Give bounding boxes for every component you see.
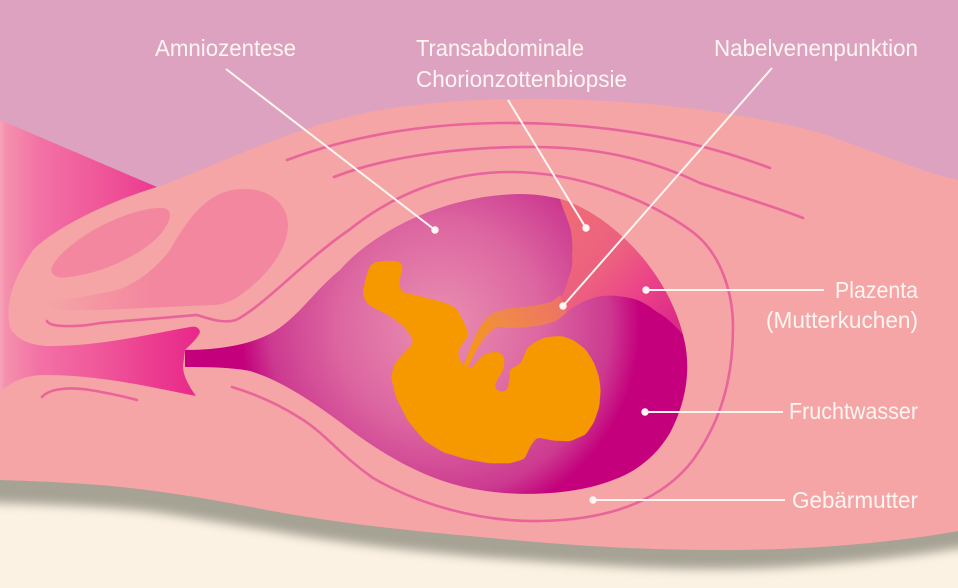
- body shadow: [0, 470, 958, 569]
- body tissue: [0, 99, 958, 550]
- label: Plazenta (Mutterkuchen): Plazenta: [835, 277, 918, 303]
- leader: Nabelvenenpunktion: [563, 68, 772, 306]
- vaginal canal: [0, 120, 205, 410]
- placenta: [556, 199, 683, 335]
- label: Transabdominale Chorionzottenbiopsie: Chorionzottenbiopsie: [416, 66, 627, 92]
- label: Plazenta (Mutterkuchen): [766, 277, 918, 333]
- amniotic cavity: [185, 194, 687, 494]
- label: Transabdominale Chorionzottenbiopsie: [416, 35, 627, 92]
- abdominal wall line 2: [334, 147, 803, 218]
- fetus: [363, 261, 601, 463]
- leader lines: [226, 68, 824, 500]
- cream floor: [0, 300, 958, 588]
- uterus outline lines: [42, 123, 803, 521]
- bladder small lobe: [51, 208, 170, 278]
- leader dots: [431, 224, 650, 504]
- bladder large lobe: [45, 189, 288, 310]
- lower wall line: [42, 388, 137, 400]
- label: Fruchtwasser: Fruchtwasser: [789, 398, 918, 424]
- leader: Plazenta: [646, 289, 824, 291]
- label: Gebärmutter: Gebärmutter: [792, 487, 918, 513]
- label: Amniozentese: Amniozentese: [155, 35, 296, 61]
- background sky: [0, 0, 958, 300]
- abdominal wall line 1: [287, 123, 770, 168]
- umbilical cord: [463, 295, 567, 368]
- leader: Gebärmutter: [593, 499, 785, 501]
- leader: Transabdominale Chorionzottenbiopsie: [508, 100, 586, 228]
- leader: Amniozentese: [226, 69, 435, 230]
- label: Plazenta (Mutterkuchen): (Mutterkuchen): [766, 307, 918, 333]
- leader: Fruchtwasser: [645, 411, 783, 413]
- label: Nabelvenenpunktion: Nabelvenenpunktion: [714, 35, 918, 61]
- uterus wall line: [47, 172, 733, 521]
- label: Transabdominale Chorionzottenbiopsie: Transabdominale: [416, 35, 584, 61]
